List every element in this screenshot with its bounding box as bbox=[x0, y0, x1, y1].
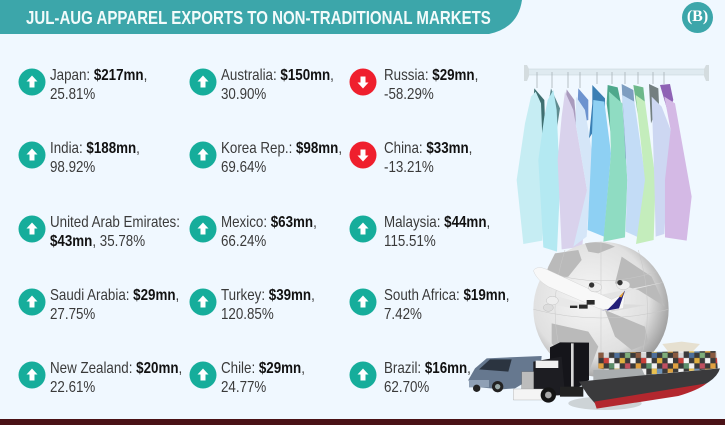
Turkey bbox=[190, 287, 315, 323]
Saudi Arabia bbox=[18, 287, 179, 323]
New Zealand: 22.61% bbox=[50, 379, 95, 396]
Mexico bbox=[190, 214, 317, 250]
Brazil bbox=[350, 360, 471, 396]
India bbox=[18, 140, 140, 176]
South Africa: South Africa: $19mn, bbox=[384, 287, 510, 304]
Malaysia: Malaysia: $44mn, bbox=[384, 214, 490, 231]
United Arab Emirates bbox=[18, 214, 180, 250]
footer bar bbox=[0, 419, 725, 425]
Australia: 30.90% bbox=[221, 86, 266, 103]
Korea Rep.: Korea Rep.: $98mn, bbox=[221, 140, 342, 157]
logo bbox=[682, 2, 713, 33]
Russia: Russia: $29mn, bbox=[384, 67, 478, 84]
Japan: 25.81% bbox=[50, 86, 95, 103]
Korea Rep.: 69.64% bbox=[221, 159, 266, 176]
Australia bbox=[190, 67, 334, 103]
Chile bbox=[190, 360, 305, 396]
Turkey: 120.85% bbox=[221, 306, 274, 323]
United Arab Emirates: $43mn, 35.78% bbox=[50, 233, 145, 250]
China: -13.21% bbox=[384, 159, 434, 176]
China: China: $33mn, bbox=[384, 140, 472, 157]
Mexico: Mexico: $63mn, bbox=[221, 214, 317, 231]
Malaysia bbox=[350, 214, 490, 250]
Saudi Arabia: Saudi Arabia: $29mn, bbox=[50, 287, 179, 304]
title: JUL-AUG APPAREL EXPORTS TO NON-TRADITIONAL MARKETS bbox=[26, 8, 491, 28]
van bbox=[468, 356, 542, 392]
India: India: $188mn, bbox=[50, 140, 140, 157]
Australia: Australia: $150mn, bbox=[221, 67, 334, 84]
container ship bbox=[568, 342, 720, 410]
Russia bbox=[350, 67, 478, 103]
airplane bbox=[533, 267, 667, 312]
New Zealand bbox=[18, 360, 182, 396]
China bbox=[350, 140, 472, 176]
South Africa bbox=[350, 287, 510, 323]
logo: (B) bbox=[687, 8, 708, 25]
Japan bbox=[18, 67, 147, 103]
hanging shirts bbox=[517, 84, 692, 252]
Mexico: 66.24% bbox=[221, 233, 266, 250]
globe bbox=[533, 242, 669, 377]
truck bbox=[513, 342, 589, 403]
Brazil: 62.70% bbox=[384, 379, 429, 396]
New Zealand: New Zealand: $20mn, bbox=[50, 360, 182, 377]
Japan: Japan: $217mn, bbox=[50, 67, 147, 84]
header banner bbox=[0, 0, 522, 34]
Russia: -58.29% bbox=[384, 86, 434, 103]
South Africa: 7.42% bbox=[384, 306, 422, 323]
India: 98.92% bbox=[50, 159, 95, 176]
Malaysia: 115.51% bbox=[384, 233, 436, 250]
Korea Rep. bbox=[190, 140, 342, 176]
Brazil: Brazil: $16mn, bbox=[384, 360, 471, 377]
clothes rail bbox=[524, 65, 709, 88]
Chile: 24.77% bbox=[221, 379, 266, 396]
Chile: Chile: $29mn, bbox=[221, 360, 305, 377]
Saudi Arabia: 27.75% bbox=[50, 306, 95, 323]
Turkey: Turkey: $39mn, bbox=[221, 287, 315, 304]
United Arab Emirates: United Arab Emirates: bbox=[50, 214, 180, 231]
